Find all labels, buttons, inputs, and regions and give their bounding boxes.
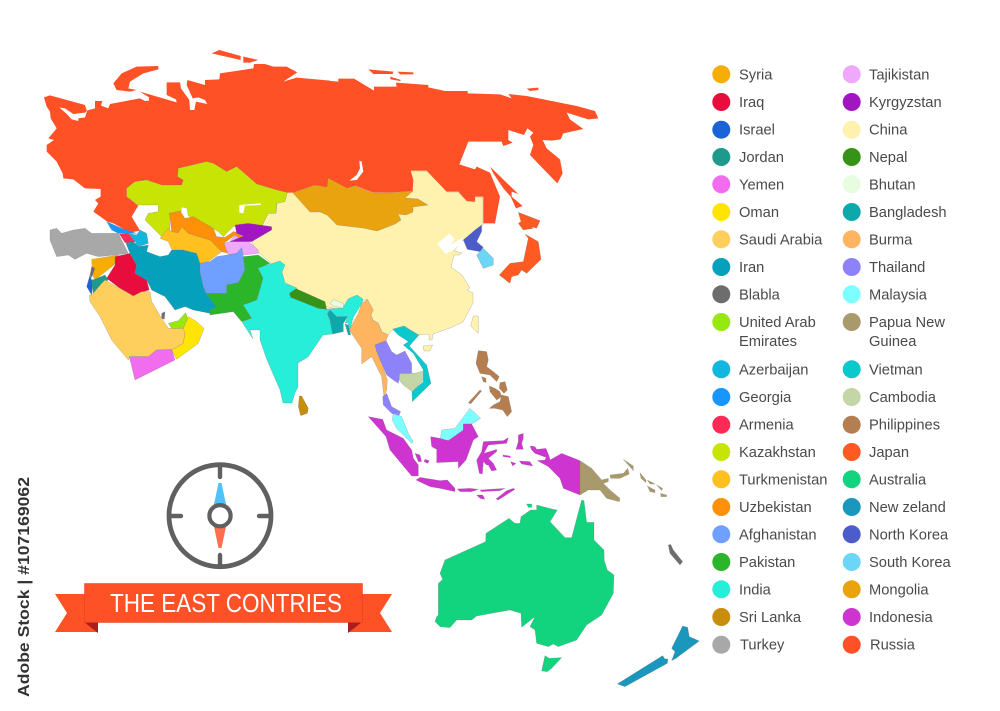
country: Israel — [87, 275, 93, 295]
ribbon left tail — [55, 594, 98, 632]
legend: Mongolia: Mongolia — [869, 582, 929, 598]
country: Vietnam — [393, 326, 431, 402]
country: Burma — [349, 299, 388, 397]
legend: Georgia — [712, 388, 792, 406]
legend: Blabla: Blabla — [739, 287, 781, 303]
legend: Nepal: Nepal — [869, 150, 907, 166]
country: Philippines — [468, 351, 512, 417]
legend: Papua New Guinea: Papua New — [869, 315, 945, 331]
legend: Pakistan — [712, 553, 795, 571]
stock credit: Adobe Stock | #107169062 — [16, 477, 33, 697]
legend: Malaysia: Malaysia — [869, 287, 928, 303]
legend: Pakistan: Pakistan — [739, 555, 795, 571]
country: Uzbekistan — [169, 211, 244, 253]
country: Bangladesh — [327, 310, 351, 335]
legend: Australia: Australia — [869, 472, 927, 488]
compass needle south — [213, 522, 227, 548]
legend: New zeland: New zeland — [869, 500, 946, 516]
legend: Syria — [712, 65, 773, 83]
legend: Kazakhstan — [712, 443, 816, 461]
legend: Kazakhstan: Kazakhstan — [739, 445, 816, 461]
country: North Korea — [463, 225, 483, 252]
legend: Russia — [843, 636, 916, 654]
legend: Japan — [843, 443, 909, 461]
country: South Korea — [477, 248, 493, 268]
legend: Afghanistan: Afghanistan — [739, 527, 817, 543]
compass ring and ticks — [169, 465, 271, 567]
legend: Israel — [712, 121, 775, 139]
country: Afghanistan — [200, 248, 245, 293]
compass needle north — [213, 483, 227, 509]
legend: Papua New Guinea — [843, 313, 945, 350]
legend: India — [712, 580, 772, 598]
banner: title ribbon — [55, 584, 392, 633]
legend: United Arab Emirates: United Arab — [739, 315, 816, 331]
ribbon centre — [84, 584, 362, 622]
legend: North Korea: North Korea — [869, 527, 949, 543]
legend: Iraq: Iraq — [739, 95, 764, 111]
country: Blabla — [90, 267, 165, 319]
legend: Bangladesh — [843, 203, 947, 221]
legend: Oman: Oman — [739, 205, 779, 221]
legend: Turkmenistan — [712, 470, 827, 488]
legend: Georgia: Georgia — [739, 390, 792, 406]
country: Yemen — [129, 349, 175, 380]
legend: Burma: Burma — [869, 232, 913, 248]
legend: Saudi Arabia — [712, 230, 823, 248]
legend: North Korea — [843, 525, 949, 543]
legend: Saudi Arabia: Saudi Arabia — [739, 232, 823, 248]
legend: Cambodia: Cambodia — [869, 390, 937, 406]
country: Turkmenistan — [160, 227, 222, 263]
legend: Azerbaijan — [712, 360, 808, 378]
legend: Australia — [843, 470, 927, 488]
legend: Jordan — [712, 148, 784, 166]
legend — [712, 65, 951, 654]
country: Saudi Arabia — [89, 280, 185, 360]
legend: Sri Lanka: Sri Lanka — [739, 610, 802, 626]
legend: Bhutan: Bhutan — [869, 177, 916, 193]
legend: China: China — [869, 123, 908, 139]
country: Mongolia — [293, 178, 428, 231]
legend: China — [843, 121, 908, 139]
country: Kazakhstan — [127, 162, 287, 237]
legend: Cambodia — [843, 388, 937, 406]
legend: Papua New Guinea: Guinea — [869, 334, 917, 350]
legend: Jordan: Jordan — [739, 150, 784, 166]
legend: Turkey: Turkey — [740, 638, 785, 654]
country: Oman — [172, 317, 204, 359]
legend: Vietman — [843, 360, 923, 378]
legend: Sri Lanka — [712, 608, 802, 626]
legend: United Arab Emirates: Emirates — [739, 334, 797, 350]
legend: Philippines: Philippines — [869, 418, 940, 434]
legend: Israel: Israel — [739, 123, 775, 139]
country: Malaysia — [392, 408, 481, 443]
legend: Armenia — [712, 416, 795, 434]
country: Sri Lanka — [298, 396, 308, 416]
legend: Tajikistan — [843, 65, 929, 83]
legend: Afghanistan — [712, 525, 817, 543]
country: New zeland — [617, 626, 699, 687]
legend: Blabla — [712, 285, 781, 303]
legend: Nepal — [843, 148, 907, 166]
legend: Yemen — [712, 175, 784, 193]
legend: Russia: Russia — [870, 638, 916, 654]
country: Japan — [499, 212, 541, 283]
legend: South Korea: South Korea — [869, 555, 951, 571]
legend: Indonesia: Indonesia — [869, 610, 934, 626]
legend: India: India — [739, 582, 772, 598]
country: Pakistan — [206, 255, 270, 322]
country: Azerbaijan — [128, 230, 148, 247]
country: Tajikistan — [224, 235, 258, 255]
legend: Japan: Japan — [869, 445, 909, 461]
title: THE EAST CONTRIES — [110, 590, 342, 618]
legend: Philippines — [843, 416, 940, 434]
country: Armenia — [119, 233, 135, 243]
legend: Thailand: Thailand — [869, 260, 925, 276]
legend: Turkey — [712, 636, 785, 654]
map of Asia and Oceania — [44, 50, 699, 687]
legend: United Arab Emirates — [712, 313, 816, 350]
country: Indonesia — [368, 417, 580, 500]
legend: Tajikistan: Tajikistan — [869, 67, 929, 83]
country: Russia — [44, 50, 598, 233]
country: Georgia — [107, 222, 137, 233]
ribbon left fold — [84, 622, 98, 633]
legend: Thailand — [843, 258, 925, 276]
legend: Vietman: Vietman — [869, 362, 923, 378]
country: Turkey — [50, 228, 128, 259]
country: Australia — [435, 500, 614, 672]
ribbon right tail — [348, 594, 392, 632]
legend: Uzbekistan — [712, 498, 812, 516]
legend: Iraq — [712, 93, 764, 111]
country: Jordan — [92, 275, 108, 295]
country: China — [252, 171, 483, 351]
legend: Bhutan — [843, 175, 916, 193]
country: Papua New Guinea — [580, 459, 667, 502]
country: Bhutan — [330, 299, 343, 308]
country: Thailand — [375, 341, 412, 417]
legend: Malaysia — [843, 285, 928, 303]
country: India — [242, 261, 363, 403]
legend: Bangladesh: Bangladesh — [869, 205, 947, 221]
legend: Azerbaijan: Azerbaijan — [739, 362, 808, 378]
icon: compass — [169, 465, 271, 567]
legend: Yemen: Yemen — [739, 177, 784, 193]
country: Cambodia — [399, 371, 423, 392]
legend: Armenia: Armenia — [739, 418, 795, 434]
legend: Turkmenistan: Turkmenistan — [739, 472, 827, 488]
country: Nepal — [289, 289, 327, 309]
legend: Iran — [712, 258, 764, 276]
legend: Indonesia — [843, 608, 934, 626]
legend: Iran: Iran — [739, 260, 764, 276]
legend: South Korea — [843, 553, 951, 571]
country: Iraq — [107, 253, 149, 296]
country: Syria — [92, 255, 118, 280]
legend: Burma — [843, 230, 913, 248]
legend: Syria: Syria — [739, 67, 773, 83]
legend: Kyrgyzstan — [843, 93, 942, 111]
country: Kyrgyzstan — [230, 223, 272, 242]
island: New Caledonia — [668, 544, 683, 565]
legend: New zeland — [843, 498, 946, 516]
legend: Mongolia — [843, 580, 929, 598]
legend: Kyrgyzstan: Kyrgyzstan — [869, 95, 942, 111]
ribbon right fold — [348, 622, 362, 633]
country: United Arab Emirates — [168, 313, 188, 328]
country: Iran — [126, 242, 217, 313]
legend: Oman — [712, 203, 779, 221]
legend: Uzbekistan: Uzbekistan — [739, 500, 812, 516]
